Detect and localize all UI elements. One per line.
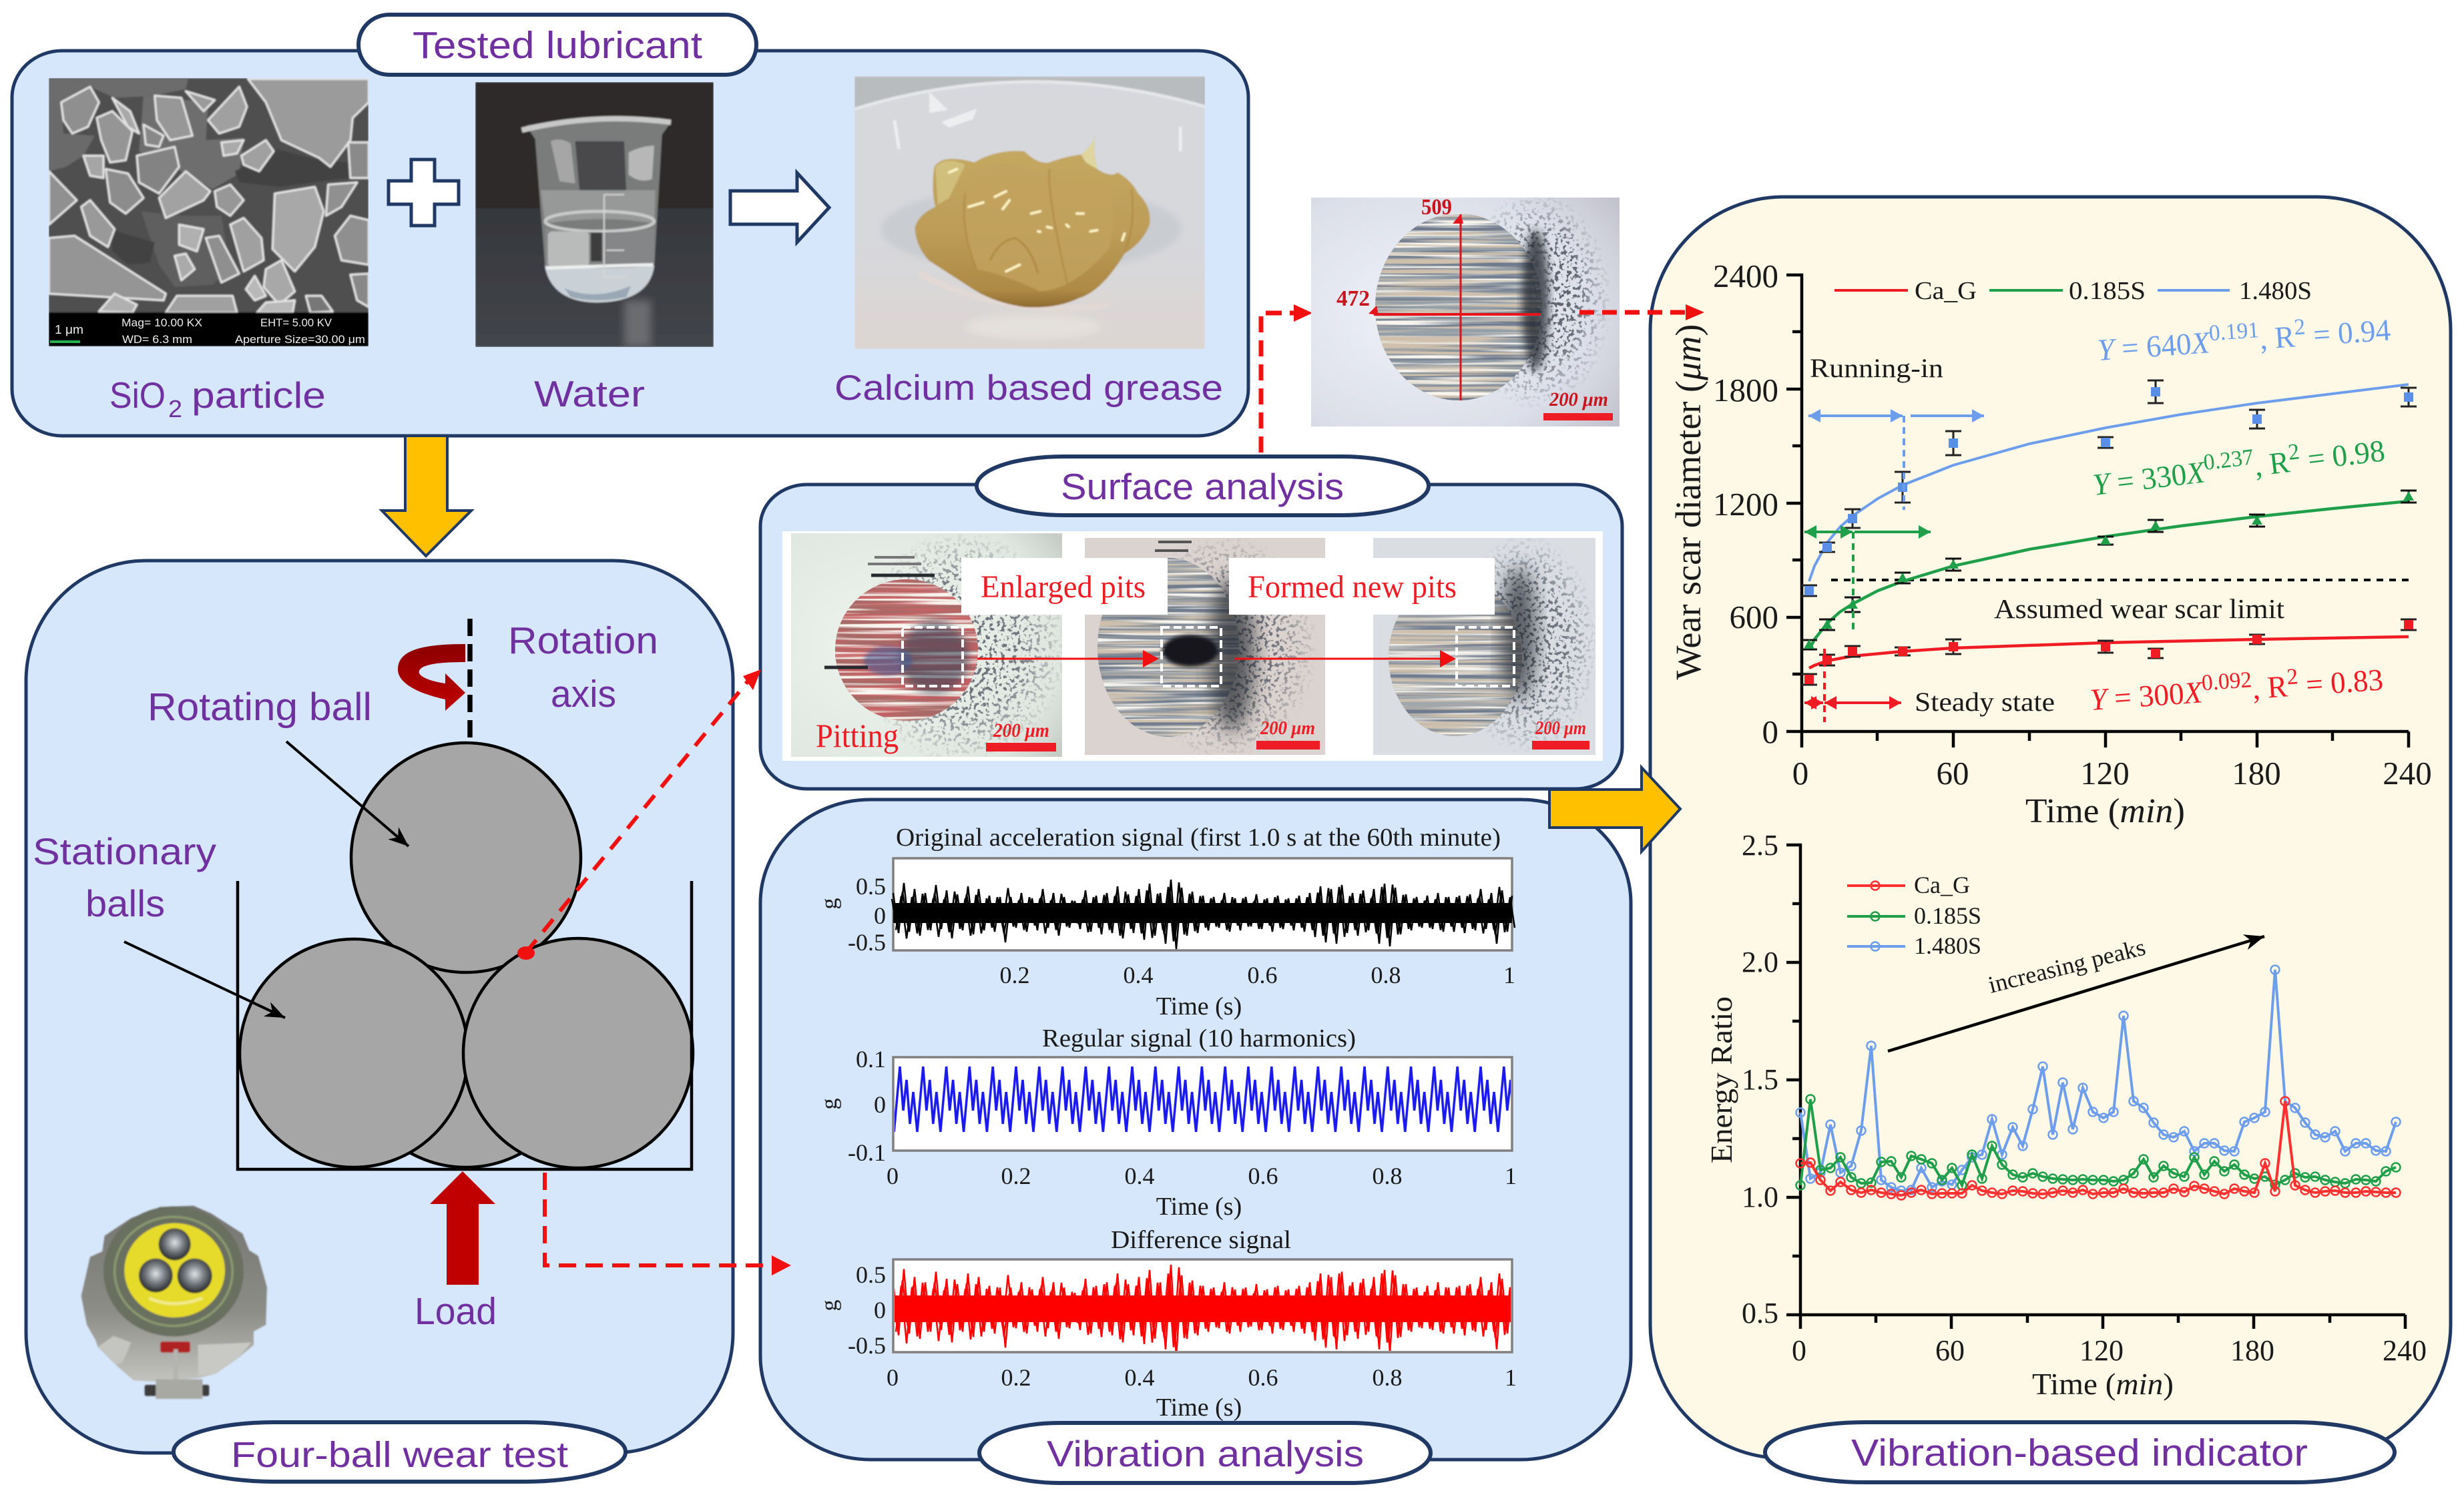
heading pill: Vibration-based indicator: Vibration-based indicator <box>1851 1432 2308 1474</box>
connector: contact point to surface analysis <box>517 669 761 960</box>
chart: difference signal: g <box>817 1300 842 1311</box>
heading pill: Four-ball wear test <box>174 1422 626 1482</box>
equation: Ca_G fit: = 0.83 <box>2297 662 2385 702</box>
x-axis tick labels: 0 <box>1792 755 1808 792</box>
label: Pitting: Pitting <box>816 717 899 754</box>
photo: wear scar with measured diameters: 509 <box>1421 195 1452 220</box>
panel: tested lubricant <box>12 15 1248 436</box>
pointer arrow: rotating ball <box>286 741 409 846</box>
chart: regular signal: g <box>817 1099 842 1109</box>
x-axis tick labels <box>1792 755 2432 792</box>
label: Formed new pits: Formed new pits <box>1248 569 1457 605</box>
annotation: running-in label: Running-in <box>1810 353 1943 383</box>
photo: wear scar with measured diameters: 472 <box>1336 286 1370 311</box>
chart: regular signal: Regular signal (10 harmonics) <box>1042 1024 1356 1053</box>
x-axis tick labels: 240 <box>2383 755 2432 792</box>
chart: original acceleration signal <box>817 824 1515 1020</box>
x-axis tick labels: 60 <box>1936 755 1969 792</box>
series: 1.480S <box>1801 380 2417 596</box>
equation: 0.185S fit: = 0.98 <box>2298 433 2387 477</box>
equation: Ca_G fit: 2 <box>2286 664 2298 689</box>
x-axis tick labels: 120 <box>2079 1334 2124 1367</box>
x-axis title: Time (min) <box>2025 792 2185 830</box>
chart: energy ratio over time <box>1704 829 2427 1401</box>
chart: difference signal: 1 <box>1505 1364 1517 1391</box>
heading pill: Vibration-based indicator <box>1765 1422 2395 1482</box>
chart: difference signal: 0 <box>887 1364 899 1391</box>
arrow: analyses to vibration-based indicator <box>1549 768 1680 852</box>
label: Stationary balls: balls <box>85 882 165 924</box>
heading pill: Vibration analysis: Vibration analysis <box>1047 1433 1364 1474</box>
connector: cup to vibration analysis <box>545 1173 791 1275</box>
y-axis tick labels <box>1742 829 1778 1329</box>
chart: difference signal: 0.2 <box>1001 1364 1031 1391</box>
chart: difference signal: 0.5 <box>856 1261 886 1288</box>
legend: Ca_G <box>1914 872 1970 898</box>
photo: wear scar with measured diameters: 200 μm <box>1549 388 1608 410</box>
arrow: pit progression 2 <box>1235 650 1456 667</box>
connector: surface analysis to wear scar image <box>1261 304 1312 453</box>
arrow: pit progression 1 <box>977 650 1159 667</box>
heading pill: Surface analysis <box>977 457 1429 515</box>
x-axis tick labels: 60 <box>1935 1334 1965 1367</box>
y-axis tick labels: 1.5 <box>1742 1063 1778 1096</box>
y-axis tick labels: 2.5 <box>1742 829 1778 862</box>
chart: difference signal: 0.4 <box>1124 1364 1155 1391</box>
equation: 0.185S fit: Y = 330X <box>2091 455 2207 502</box>
photo: pitting wear scar <box>791 531 1068 764</box>
photo: new pits wear scar <box>1373 534 1599 755</box>
annotation: running-in range 1.480S <box>1808 416 1984 510</box>
chart: regular signal: 0.1 <box>856 1046 886 1073</box>
heading pill: Surface analysis: Surface analysis <box>1061 466 1344 507</box>
y-axis tick labels: 1200 <box>1713 486 1778 523</box>
label: Rotation axis: Rotation <box>508 619 658 662</box>
label: Stationary balls: Stationary <box>33 830 216 872</box>
chart: original acceleration signal: g <box>817 898 842 909</box>
diagram: four balls in cup <box>238 743 693 1169</box>
y-axis tick labels: 2400 <box>1713 258 1778 294</box>
chart: original acceleration signal: 0.6 <box>1247 962 1278 988</box>
equation: 1.480S fit: Y = 640X <box>2096 325 2211 367</box>
label: SiO2 particle: 2 <box>168 395 182 422</box>
series: Ca_G <box>1801 619 2417 685</box>
equation: 0.185S fit: 2 <box>2287 439 2301 465</box>
y-axis title: Wear scar diameter (μm) <box>1668 324 1708 679</box>
photo: pitting wear scar: 200 μm <box>993 719 1049 741</box>
series: 0.185S <box>1800 1099 2396 1185</box>
assumed wear scar limit line <box>1831 579 2411 581</box>
equation: 1.480S fit: 2 <box>2293 314 2306 340</box>
photo: SEM image of SiO2 particles: EHT= 5.00 KV <box>260 316 332 329</box>
label: Enlarged pits: Enlarged pits <box>981 569 1146 605</box>
annotation: steady state range: Steady state <box>1915 687 2055 717</box>
series: 0.185S <box>1801 491 2417 650</box>
chart: difference signal <box>817 1226 1517 1422</box>
chart: regular signal: -0.1 <box>848 1139 886 1166</box>
connector: wear scar image to chart <box>1579 304 1704 320</box>
chart: original acceleration signal: 0.5 <box>856 873 886 900</box>
y-axis tick labels: 0.5 <box>1742 1297 1778 1329</box>
label: Rotating ball: Rotating ball <box>148 685 372 729</box>
panel: four-ball wear test <box>26 561 733 1482</box>
equation: Ca_G fit: 0.092 <box>2201 667 2252 695</box>
annotation: running-in range 0.185S <box>1804 532 1931 634</box>
chart: regular signal: Time (s) <box>1156 1193 1242 1221</box>
chart: original acceleration signal: Time (s) <box>1156 992 1242 1020</box>
panel: vibration analysis <box>760 800 1631 1483</box>
series: Ca_G <box>1800 1101 2396 1195</box>
chart: original acceleration signal: 0.4 <box>1123 962 1154 988</box>
chart: difference signal: 0 <box>874 1297 886 1323</box>
legend: 1.480S <box>2239 277 2312 305</box>
rotation axis line <box>467 619 473 738</box>
y-axis tick labels: 1.0 <box>1742 1181 1778 1213</box>
y-axis tick labels: 600 <box>1729 599 1778 635</box>
legend: 1.480S <box>1914 932 1981 959</box>
label: SiO2 particle: particle <box>192 374 326 416</box>
y-axis tick labels: 2.0 <box>1742 946 1778 978</box>
chart: difference signal: 0.6 <box>1248 1364 1278 1391</box>
y-axis title: Energy Ratio <box>1704 996 1738 1163</box>
y-axis tick labels <box>1713 258 1778 750</box>
white image strip <box>782 531 1603 761</box>
photo: new pits wear scar: 200 μm <box>1535 718 1586 739</box>
label: Stationary balls <box>33 830 216 924</box>
legend: Ca_G <box>1915 277 1977 305</box>
photo: enlarged pits wear scar <box>1085 534 1325 761</box>
legend <box>1847 872 1981 959</box>
label: Formed new pits <box>1229 558 1495 615</box>
equation: 1.480S fit: 0.191 <box>2208 318 2260 346</box>
chart: difference signal: Difference signal <box>1111 1226 1291 1254</box>
label: Load: Load <box>415 1290 497 1333</box>
series: 1.480S <box>1800 970 2396 1191</box>
chart: regular signal: 0.8 <box>1373 1163 1402 1189</box>
chart: regular signal: 0 <box>874 1091 886 1118</box>
label: Enlarged pits <box>961 558 1168 615</box>
legend: 0.185S <box>2069 277 2146 305</box>
y-axis tick labels: 1800 <box>1713 372 1778 408</box>
photo: enlarged pits wear scar: 200 μm <box>1260 718 1315 739</box>
heading pill: Tested lubricant: Tested lubricant <box>413 24 702 67</box>
label: Rotation axis <box>508 619 658 715</box>
photo: SEM image of SiO2 particles: WD= 6.3 mm <box>122 333 192 346</box>
chart: original acceleration signal: 0.2 <box>1000 962 1029 988</box>
chart: wear scar diameter over time <box>1668 258 2432 830</box>
icon: load arrow <box>430 1171 495 1285</box>
chart: difference signal: 0.8 <box>1373 1364 1402 1391</box>
label: Rotation axis: axis <box>551 673 616 715</box>
chart: original acceleration signal: 0.8 <box>1371 962 1401 988</box>
heading pill: Four-ball wear test: Four-ball wear test <box>231 1435 568 1475</box>
chart: regular signal: 1 <box>1505 1163 1517 1189</box>
chart: regular signal: 0 <box>887 1163 899 1189</box>
photo: SEM image of SiO2 particles: Aperture Size=30.00 μm <box>235 333 365 346</box>
arrow: tested lubricant to four-ball test <box>382 436 471 556</box>
x-axis tick labels: 180 <box>2232 755 2281 792</box>
chart: original acceleration signal: Original acceleration signal (first 1.0 s at the 60th minute) <box>896 824 1501 852</box>
chart: original acceleration signal: 0 <box>874 902 886 929</box>
label: SiO2 particle: SiO <box>109 374 166 416</box>
legend <box>1834 277 2312 305</box>
chart: regular signal: 0.2 <box>1001 1163 1031 1189</box>
axes and ticks <box>1786 845 2405 1329</box>
chart: difference signal: -0.5 <box>848 1332 886 1359</box>
icon: curved rotation arrow <box>398 644 465 711</box>
label: Water: Water <box>534 373 645 414</box>
pointer arrow: stationary balls <box>124 942 285 1018</box>
equation: Ca_G fit: Y = 300X <box>2089 675 2204 717</box>
equation: 0.185S fit: , R <box>2252 444 2292 483</box>
icon: process arrow <box>730 173 829 242</box>
photo: SEM image of SiO2 particles: Mag= 10.00 KX <box>121 316 202 329</box>
dashed selection boxes <box>903 627 1514 686</box>
x-axis tick labels: 0 <box>1792 1334 1806 1367</box>
y-axis tick labels: 0 <box>1762 713 1778 750</box>
photo: SEM image of SiO2 particles: 1 μm <box>55 323 83 336</box>
equation: 0.185S fit: 0.237 <box>2202 444 2255 475</box>
icon: plus sign <box>389 160 459 226</box>
legend: 0.185S <box>1914 902 1981 929</box>
chart: regular signal <box>817 1024 1517 1221</box>
photo: four-ball test cup <box>81 1206 267 1399</box>
panel: surface analysis <box>760 457 1622 789</box>
photo: beaker of water <box>475 82 714 347</box>
label: Calcium based grease: Calcium based grease <box>834 368 1223 408</box>
chart: regular signal: 0.4 <box>1124 1163 1155 1189</box>
photo: calcium based grease <box>854 76 1206 349</box>
x-axis tick labels: 240 <box>2383 1334 2427 1367</box>
label: increasing peaks: increasing peaks <box>1985 934 2148 998</box>
chart: original acceleration signal: 1 <box>1503 962 1515 988</box>
heading pill: Tested lubricant <box>358 15 756 75</box>
photo: wear scar with measured diameters <box>1311 190 1620 426</box>
x-axis tick labels: 180 <box>2230 1334 2274 1367</box>
photo: SEM image of SiO2 particles <box>49 78 368 346</box>
axes and ticks <box>1786 275 2409 747</box>
chart: regular signal: 0.6 <box>1248 1163 1278 1189</box>
equation: Ca_G fit: , R <box>2251 669 2289 705</box>
x-axis title: Time (min) <box>2032 1367 2174 1401</box>
heading pill: Vibration analysis <box>979 1423 1431 1483</box>
equation: 1.480S fit: = 0.94 <box>2304 312 2392 352</box>
equation: 1.480S fit: , R <box>2258 319 2296 356</box>
arrow: increasing peaks <box>1888 936 2264 1051</box>
x-axis tick labels <box>1792 1334 2427 1367</box>
panel: vibration-based indicator <box>1650 197 2451 1482</box>
x-axis tick labels: 120 <box>2080 755 2130 792</box>
chart: original acceleration signal: -0.5 <box>848 929 886 956</box>
chart: difference signal: Time (s) <box>1156 1394 1242 1422</box>
label: Assumed wear scar limit: Assumed wear scar limit <box>1994 593 2285 624</box>
